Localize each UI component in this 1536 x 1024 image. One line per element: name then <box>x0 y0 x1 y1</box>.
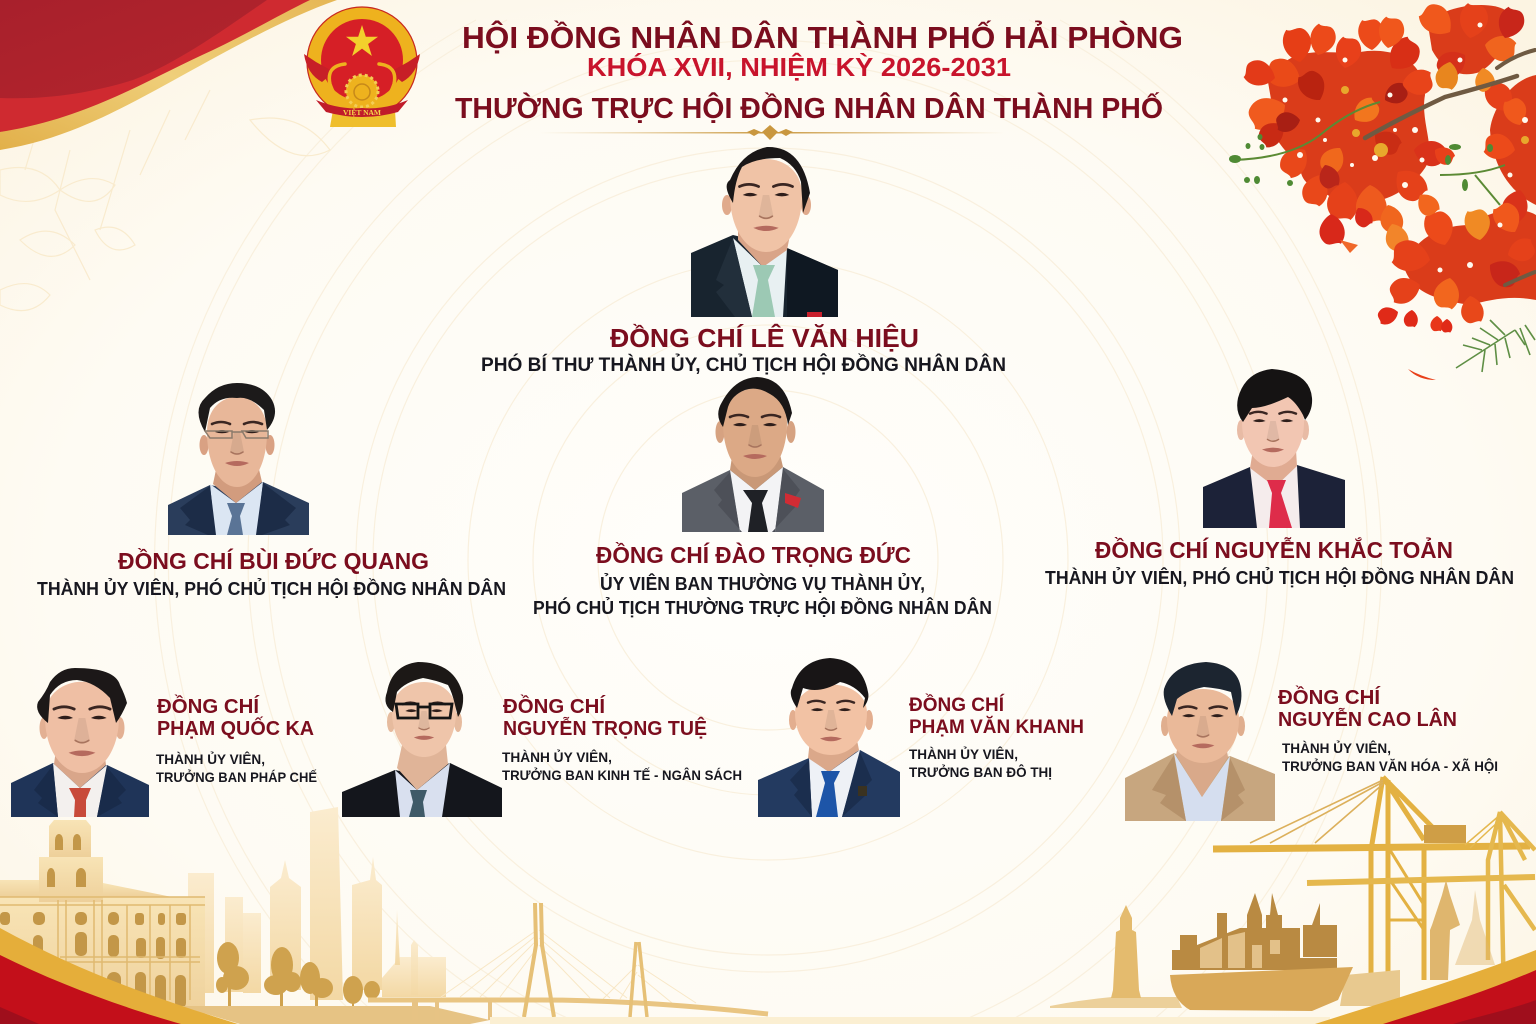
role: TRƯỞNG BAN KINH TẾ - NGÂN SÁCH <box>502 766 742 783</box>
role, line one: ỦY VIÊN BAN THƯỜNG VỤ THÀNH ỦY, <box>600 573 925 594</box>
role, line two: PHÓ CHỦ TỊCH THƯỜNG TRỰC HỘI ĐỒNG NHÂN DÂN <box>533 597 992 618</box>
title: HỘI ĐỒNG NHÂN DÂN THÀNH PHỐ HẢI PHÒNG <box>462 19 1183 55</box>
role: PHÓ BÍ THƯ THÀNH ỦY, CHỦ TỊCH HỘI ĐỒNG NHÂN DÂN <box>481 354 1006 376</box>
red band <box>0 955 181 1024</box>
gold band <box>0 0 337 150</box>
base <box>330 110 396 127</box>
background towers <box>188 807 446 1000</box>
fern <box>1456 320 1535 372</box>
gold band <box>0 928 238 1024</box>
member: Bùi Đức Quang <box>37 383 506 599</box>
flower gaps and stamens <box>1282 22 1528 272</box>
name: ĐỒNG CHÍ <box>157 694 259 718</box>
member: Phạm Văn Khanh <box>758 658 1084 817</box>
role <box>1282 739 1498 774</box>
heading: standing committee: THƯỜNG TRỰC HỘI ĐỒNG NHÂN DÂN THÀNH PHỐ <box>455 91 1163 125</box>
portrait <box>1203 369 1345 528</box>
cable-stayed bridge <box>368 903 1330 1024</box>
port: cranes, lighthouse and ship <box>1050 777 1535 1011</box>
branch <box>1365 76 1517 138</box>
containers <box>1200 932 1280 968</box>
name: ĐỒNG CHÍ ĐÀO TRỌNG ĐỨC <box>596 541 911 568</box>
name: NGUYỄN CAO LÂN <box>1278 707 1457 731</box>
cables <box>441 930 696 1003</box>
role: TRƯỞNG BAN PHÁP CHẾ <box>156 768 317 785</box>
name <box>1278 685 1457 731</box>
portrait <box>691 147 838 317</box>
pylon one <box>524 903 554 1017</box>
name: ĐỒNG CHÍ NGUYỄN KHẮC TOẢN <box>1095 535 1453 563</box>
banner <box>316 100 408 117</box>
name: ĐỒNG CHÍ LÊ VĂN HIỆU <box>610 323 919 353</box>
portrait <box>168 383 309 535</box>
member: Phạm Quốc Ka <box>11 668 317 817</box>
crane two <box>1307 812 1535 1000</box>
title ornament divider <box>540 125 1005 140</box>
crane one trolley <box>1424 825 1466 843</box>
member: Nguyễn Trọng Tuệ <box>342 662 742 817</box>
role: THÀNH ỦY VIÊN, PHÓ CHỦ TỊCH HỘI ĐỒNG NHÂN DÂN <box>1045 567 1514 588</box>
bottom-right ribbon <box>1315 950 1536 1024</box>
member: Lê Văn Hiệu <box>481 147 1006 376</box>
name: PHẠM VĂN KHANH <box>909 716 1084 738</box>
member: Đào Trọng Đức <box>533 377 992 618</box>
top-left ribbon <box>0 0 337 150</box>
pylon two <box>630 942 647 1017</box>
emblem label: VIỆT NAM <box>343 108 381 117</box>
falling petal <box>1408 369 1436 380</box>
portrait <box>682 377 824 532</box>
green twigs <box>1234 102 1505 205</box>
city hall building <box>0 820 205 1020</box>
skyline: city hall and towers <box>0 807 490 1024</box>
name: NGUYỄN TRỌNG TUỆ <box>503 716 707 740</box>
subtitle: term: KHÓA XVII, NHIỆM KỲ 2026-2031 <box>587 52 1011 82</box>
dark red band <box>0 0 267 98</box>
name: ĐỒNG CHÍ <box>909 694 1005 716</box>
role <box>156 750 317 785</box>
background drum pattern <box>155 20 1381 1020</box>
port towers <box>1430 880 1495 980</box>
crane one <box>1213 777 1530 990</box>
name: ĐỒNG CHÍ <box>503 694 605 718</box>
role <box>909 745 1052 780</box>
name <box>503 694 707 740</box>
portrait <box>758 658 900 817</box>
role: THÀNH ỦY VIÊN, PHÓ CHỦ TỊCH HỘI ĐỒNG NHÂN DÂN <box>37 578 506 599</box>
national emblem <box>304 7 420 127</box>
portrait <box>1125 662 1275 821</box>
role: THÀNH ỦY VIÊN, <box>156 750 265 767</box>
far shore <box>1050 997 1182 1008</box>
name: PHẠM QUỐC KA <box>157 716 314 740</box>
name: ĐỒNG CHÍ BÙI ĐỨC QUANG <box>118 547 429 574</box>
member: Nguyễn Khắc Toản <box>1045 369 1514 588</box>
container ship <box>1170 893 1353 1011</box>
name <box>157 694 314 740</box>
star <box>346 25 378 56</box>
city hall cornices and columns <box>0 897 205 1000</box>
role: TRƯỞNG BAN ĐÔ THỊ <box>909 763 1052 780</box>
role <box>502 748 742 783</box>
flower base masses <box>1268 5 1536 305</box>
red band <box>0 0 310 132</box>
ship upper structures <box>1172 893 1337 970</box>
falling petal <box>1340 240 1358 253</box>
ribbon sides <box>304 54 420 82</box>
city hall details <box>0 834 186 1008</box>
deck <box>368 1000 768 1014</box>
rice stalks <box>329 64 395 100</box>
riverbank <box>180 1006 490 1024</box>
bottom-left ribbon <box>0 928 238 1024</box>
red band <box>1383 970 1536 1024</box>
role: THÀNH ỦY VIÊN, <box>502 748 612 765</box>
ship hull <box>1170 967 1353 1011</box>
background floral linework <box>0 90 330 311</box>
petals <box>1242 0 1536 333</box>
role: TRƯỞNG BAN VĂN HÓA - XÃ HỘI <box>1282 757 1498 774</box>
dark red corner <box>0 1007 39 1024</box>
dock structures <box>1340 970 1400 1006</box>
portrait <box>11 668 149 817</box>
dark red corner <box>1453 1000 1536 1024</box>
flowering branch <box>1229 0 1536 380</box>
role: THÀNH ỦY VIÊN, <box>1282 739 1391 756</box>
trees <box>216 942 380 1012</box>
name: ĐỒNG CHÍ <box>1278 685 1380 709</box>
role: THÀNH ỦY VIÊN, <box>909 745 1018 762</box>
member: Nguyễn Cao Lân <box>1125 662 1498 821</box>
gold band <box>1315 950 1536 1024</box>
name <box>909 694 1084 738</box>
lighthouse <box>1111 905 1141 998</box>
portrait <box>342 662 502 817</box>
gear <box>346 75 378 107</box>
water <box>490 1017 1330 1024</box>
